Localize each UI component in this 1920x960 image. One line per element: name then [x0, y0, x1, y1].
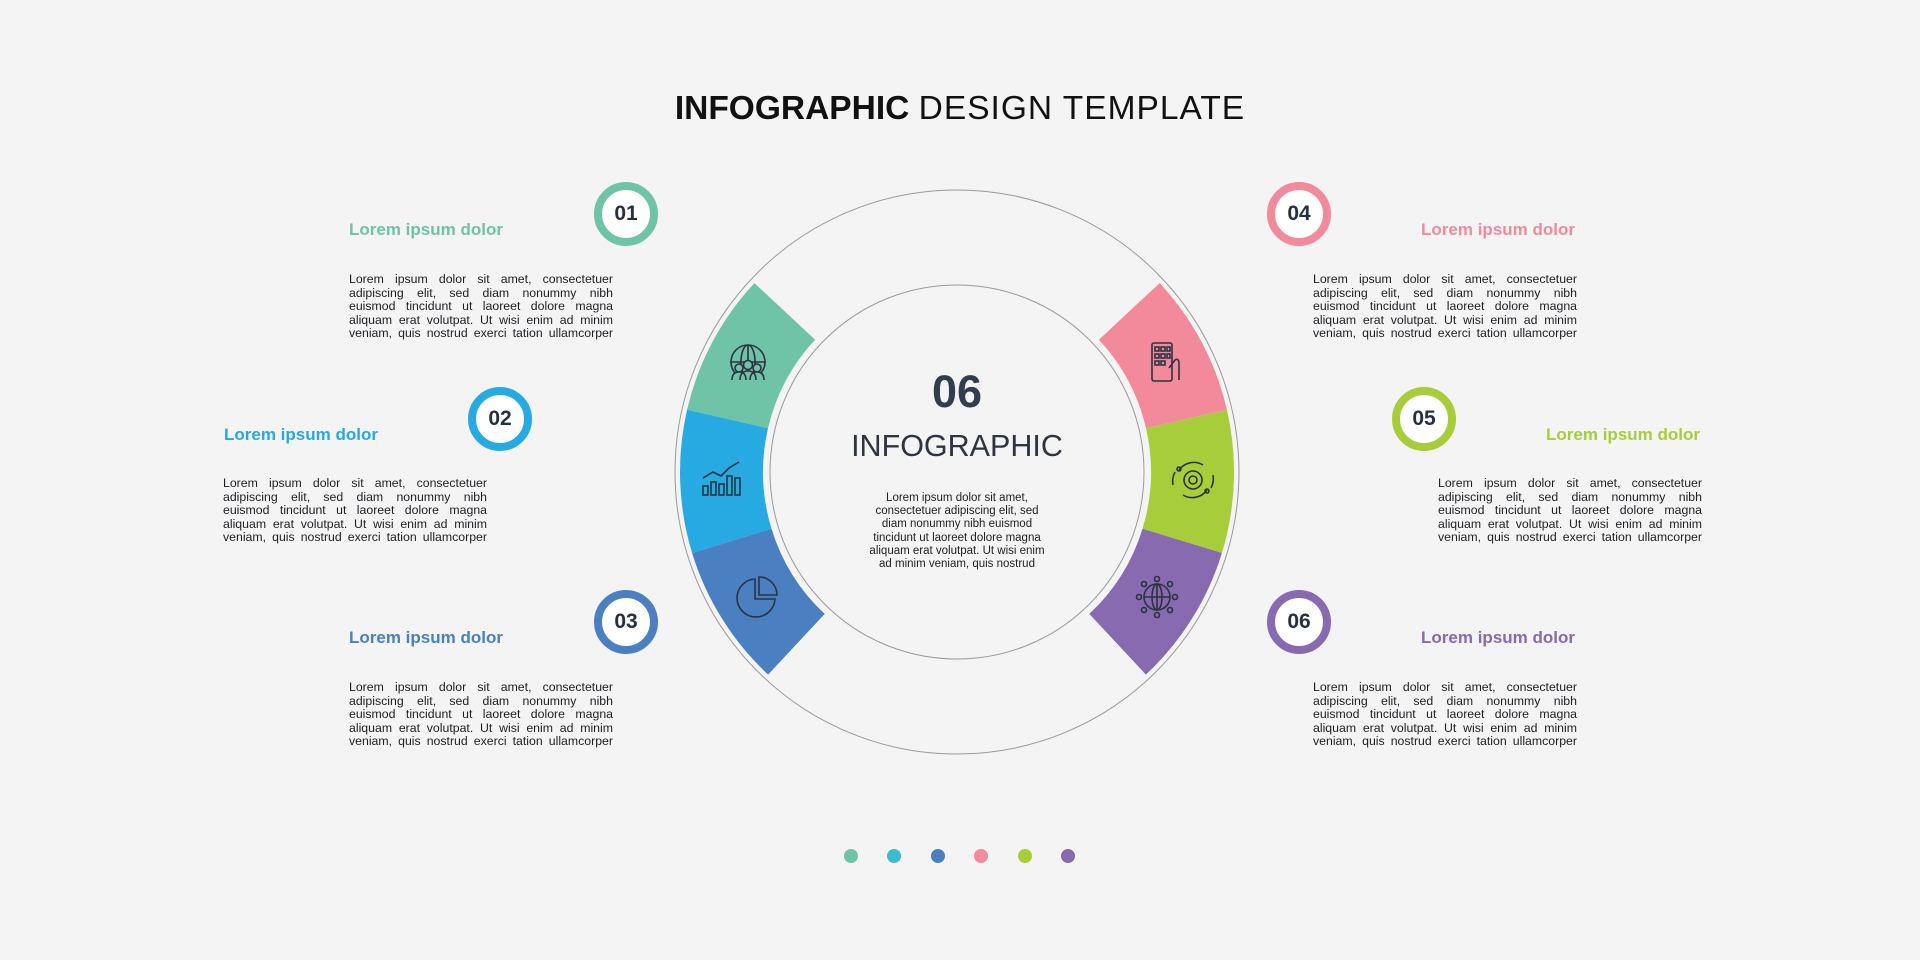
badge 02 — [468, 387, 532, 451]
badge 03: 03 — [614, 610, 638, 633]
badge 04 — [1267, 182, 1331, 246]
text 02: aliquam erat volutpat. Ut wisi enim ad minim — [223, 517, 487, 531]
badge 05 — [1392, 387, 1456, 451]
text 03: adipiscing elit, sed diam nonummy nibh — [349, 694, 613, 708]
badge 05: 05 — [1412, 407, 1436, 430]
text 05: adipiscing elit, sed diam nonummy nibh — [1438, 490, 1702, 504]
heading 04: Lorem ipsum dolor — [1421, 220, 1575, 239]
text 06: veniam, quis nostrud exerci tation ullamcorper — [1313, 734, 1577, 748]
icon: mobile hand — [1152, 343, 1179, 381]
segment 3 dark blue — [692, 529, 825, 675]
text 03: veniam, quis nostrud exerci tation ullamcorper — [349, 734, 613, 748]
center text: tincidunt ut laoreet dolore magna — [873, 532, 1041, 544]
text 06: aliquam erat volutpat. Ut wisi enim ad minim — [1313, 721, 1577, 735]
badge 03 — [594, 590, 658, 654]
center text: Lorem ipsum dolor sit amet, — [886, 492, 1028, 504]
text 01: adipiscing elit, sed diam nonummy nibh — [349, 286, 613, 300]
color dots — [844, 849, 1075, 863]
text 04 — [1313, 272, 1577, 340]
heading 06: Lorem ipsum dolor — [1421, 628, 1575, 647]
heading 03: Lorem ipsum dolor — [349, 628, 503, 647]
badge 06 — [1267, 590, 1331, 654]
text 02 — [223, 476, 487, 544]
center text — [869, 492, 1045, 570]
badge 01: 01 — [614, 202, 638, 225]
icon: globe people — [731, 345, 765, 380]
segment 5 lime — [1142, 410, 1234, 553]
text 02: veniam, quis nostrud exerci tation ullamcorper — [223, 530, 487, 544]
text 05: euismod tincidunt ut laoreet dolore magna — [1438, 503, 1702, 517]
segment 1 green — [687, 283, 815, 428]
heading 01: Lorem ipsum dolor — [349, 220, 503, 239]
badge 02: 02 — [488, 407, 512, 430]
badge 06: 06 — [1287, 610, 1311, 633]
text 01 — [349, 272, 613, 340]
text 01: veniam, quis nostrud exerci tation ullamcorper — [349, 326, 613, 340]
text 05 — [1438, 476, 1702, 544]
segment 6 purple — [1089, 529, 1222, 675]
text 06: Lorem ipsum dolor sit amet, consectetuer — [1313, 680, 1577, 694]
text 01: aliquam erat volutpat. Ut wisi enim ad minim — [349, 313, 613, 327]
text 03: euismod tincidunt ut laoreet dolore magna — [349, 707, 613, 721]
text 06: euismod tincidunt ut laoreet dolore magna — [1313, 707, 1577, 721]
text 02: Lorem ipsum dolor sit amet, consectetuer — [223, 476, 487, 490]
center label: INFOGRAPHIC — [851, 429, 1063, 463]
text 01: euismod tincidunt ut laoreet dolore magna — [349, 299, 613, 313]
text 03 — [349, 680, 613, 748]
text 04: adipiscing elit, sed diam nonummy nibh — [1313, 286, 1577, 300]
text 05: Lorem ipsum dolor sit amet, consectetuer — [1438, 476, 1702, 490]
heading 02: Lorem ipsum dolor — [224, 425, 378, 444]
center text: consectetuer adipiscing elit, sed — [875, 505, 1038, 517]
icon: gear — [1173, 462, 1213, 498]
heading 05: Lorem ipsum dolor — [1546, 425, 1700, 444]
text 06: adipiscing elit, sed diam nonummy nibh — [1313, 694, 1577, 708]
center text: diam nonummy nibh euismod — [882, 518, 1032, 530]
segment 4 pink — [1099, 283, 1227, 428]
center text: aliquam erat volutpat. Ut wisi enim — [869, 545, 1045, 557]
title: INFOGRAPHIC DESIGN TEMPLATE — [675, 90, 1245, 127]
text 06 — [1313, 680, 1577, 748]
center text: ad minim veniam, quis nostrud — [879, 558, 1035, 570]
text 03: Lorem ipsum dolor sit amet, consectetuer — [349, 680, 613, 694]
text 02: adipiscing elit, sed diam nonummy nibh — [223, 490, 487, 504]
text 03: aliquam erat volutpat. Ut wisi enim ad minim — [349, 721, 613, 735]
text 05: aliquam erat volutpat. Ut wisi enim ad minim — [1438, 517, 1702, 531]
text 05: veniam, quis nostrud exerci tation ullamcorper — [1438, 530, 1702, 544]
icon: network globe — [1136, 576, 1178, 618]
text 04: euismod tincidunt ut laoreet dolore magna — [1313, 299, 1577, 313]
text 04: Lorem ipsum dolor sit amet, consectetuer — [1313, 272, 1577, 286]
icon: pie chart — [737, 577, 777, 617]
badge 01 — [594, 182, 658, 246]
icon: bar chart — [703, 462, 740, 495]
badge 04: 04 — [1287, 202, 1311, 225]
text 02: euismod tincidunt ut laoreet dolore magna — [223, 503, 487, 517]
text 04: aliquam erat volutpat. Ut wisi enim ad minim — [1313, 313, 1577, 327]
text 04: veniam, quis nostrud exerci tation ullamcorper — [1313, 326, 1577, 340]
text 01: Lorem ipsum dolor sit amet, consectetuer — [349, 272, 613, 286]
segment 2 blue — [680, 410, 772, 553]
center number: 06 — [932, 366, 982, 417]
